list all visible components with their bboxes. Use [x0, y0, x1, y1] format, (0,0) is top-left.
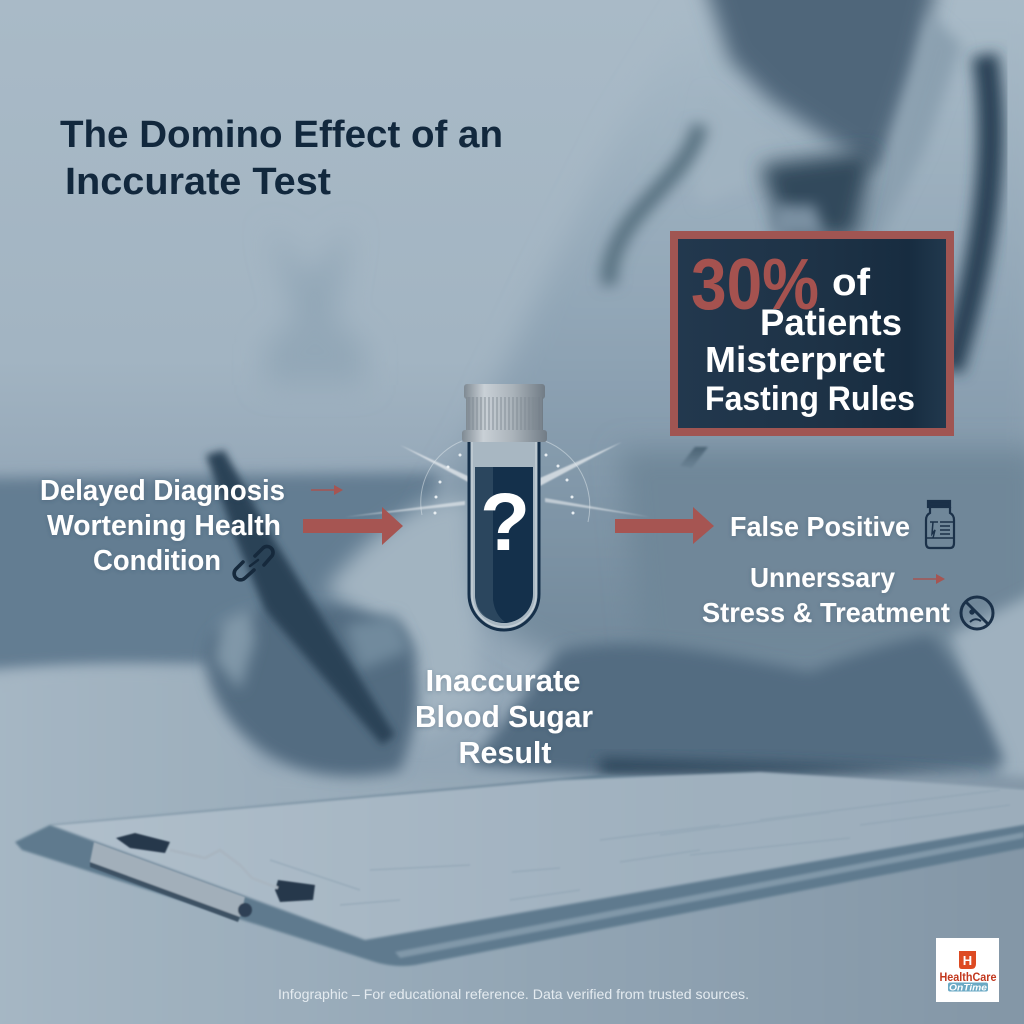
- background: forearm right: [470, 635, 1005, 778]
- logo mark: [959, 951, 976, 969]
- footer note: Infographic – For educational reference. Data verified from trusted sources.: [278, 986, 749, 1002]
- text: unnecessary stress and treatment: [702, 562, 950, 628]
- text: unnecessary stress and treatment: Stress & Treatment: [702, 597, 950, 628]
- background: coat buttons shadow: [680, 447, 708, 468]
- background: sleeve left of tube: [325, 498, 480, 740]
- background: lower coat shade: [620, 450, 1024, 660]
- tube glass highlight: [472, 442, 536, 627]
- text: inaccurate blood sugar result: Inaccurate: [426, 663, 580, 698]
- text: inaccurate blood sugar result: [415, 663, 593, 770]
- tube glass: [469, 440, 539, 630]
- background: stethoscope tube right: [950, 55, 991, 370]
- background: left collar: [690, 90, 785, 205]
- background: dark band on the left: [0, 472, 440, 672]
- logo: HealthCare OnTime: [936, 938, 999, 1002]
- background: board highlight: [395, 832, 1024, 958]
- callout text: of: [832, 262, 870, 304]
- tube liquid reflection: [475, 467, 505, 622]
- title: The Domino Effect of an: [60, 114, 503, 156]
- callout text: Misterpret: [705, 339, 885, 380]
- background: clip: [90, 833, 315, 922]
- logo: HealthCare OnTime: OnTime: [949, 982, 988, 994]
- icon: medicine bottle: [926, 501, 954, 548]
- background: doctor coat: [400, 0, 1024, 790]
- callout text: Fasting Rules: [705, 380, 915, 418]
- tube cap: [462, 384, 547, 442]
- text: false positive: False Positive: [730, 511, 910, 542]
- background: neck and face: [700, 0, 940, 170]
- text: delayed diagnosis: [40, 475, 285, 577]
- background: pen: [206, 450, 395, 745]
- title: Inccurate Test: [65, 161, 331, 203]
- background: paper text lines: [270, 790, 1010, 905]
- background: clipboard board: [15, 775, 1024, 966]
- logo wordmark: HealthCare: [940, 972, 996, 984]
- background: finger highlights: [215, 608, 255, 690]
- background: tie blade: [770, 205, 825, 236]
- logo: HealthCare OnTime: H: [963, 953, 972, 968]
- background: hand: [207, 606, 417, 776]
- tube liquid: [475, 467, 533, 623]
- text: delayed diagnosis: Delayed Diagnosis: [40, 475, 285, 507]
- background: table: [0, 665, 1024, 1024]
- callout text: Patients: [760, 302, 902, 343]
- callout text: [691, 245, 915, 418]
- arrow: small right arrow: [913, 574, 945, 584]
- background: knuckle highlight: [345, 615, 410, 670]
- text: delayed diagnosis: Wortening Health: [47, 510, 281, 542]
- text: inaccurate blood sugar result: Result: [458, 735, 552, 770]
- arrow: right big arrow: [615, 507, 714, 544]
- icon: test tube with question mark: [462, 384, 547, 630]
- background: right collar: [835, 15, 962, 280]
- background: tie knot: [760, 150, 875, 238]
- text: inaccurate blood sugar result: Blood Sugar: [415, 699, 593, 734]
- background: stethoscope tube left: [609, 125, 700, 285]
- text: delayed diagnosis: Condition: [93, 545, 221, 577]
- background: blurred vase: [265, 225, 365, 385]
- icon: broken chain: [234, 546, 273, 580]
- arrow: small left arrow: [311, 485, 343, 495]
- background: right cuff: [950, 590, 1024, 790]
- glow rays around tube: [345, 441, 650, 522]
- icon: no stress face: [961, 597, 993, 629]
- title: [60, 114, 503, 203]
- background: arm shadow at paper: [600, 758, 1000, 780]
- callout text: 30%: [691, 245, 819, 325]
- background: clipboard paper: [50, 772, 1024, 940]
- text: unnecessary stress and treatment: Unnerssary: [750, 562, 895, 593]
- arrow: left big arrow: [303, 507, 403, 545]
- question mark: ?: [480, 477, 530, 568]
- callout: 30% of patients: [674, 235, 950, 432]
